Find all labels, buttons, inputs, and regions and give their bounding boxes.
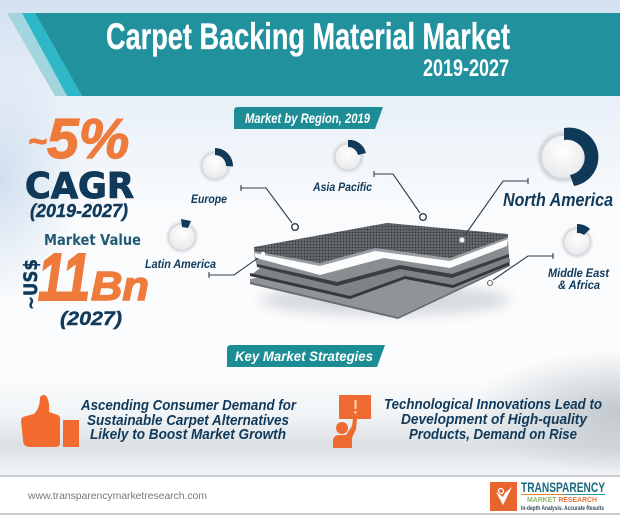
strategy text: technological innovations: Development of High-quality xyxy=(401,411,588,428)
market value figure: 11 xyxy=(38,240,90,315)
logo: Transparency Market Research xyxy=(490,479,605,512)
label: Middle East and Africa: & Africa xyxy=(558,278,600,292)
icon: thumbs up xyxy=(21,395,79,447)
heading pill: market by region: Market by Region, 2019 xyxy=(245,110,370,126)
donut: North America xyxy=(538,128,598,186)
donut: Asia Pacific xyxy=(333,140,366,172)
leader line: Latin America xyxy=(209,252,265,278)
strategy text: technological innovations: Products, Demand on Rise xyxy=(409,426,577,443)
strategy text: consumer demand: Sustainable Carpet Alternatives xyxy=(87,412,289,429)
logo tagline top: MARKET RESEARCH xyxy=(527,495,597,504)
market value label: Market Value xyxy=(44,231,141,249)
subtitle years: 2019-2027 xyxy=(423,55,509,82)
label: Europe: Europe xyxy=(191,192,227,206)
market value unit: Bn xyxy=(91,263,149,309)
leader line: Asia Pacific xyxy=(374,171,426,220)
footer band xyxy=(0,475,620,518)
market value stats xyxy=(20,231,149,330)
donut: Latin America xyxy=(167,219,197,252)
CAGR label: CAGR xyxy=(25,166,134,207)
strategy text: consumer demand: Ascending Consumer Demand for xyxy=(80,397,297,414)
donut: Europe xyxy=(200,148,233,181)
CAGR value: ~ xyxy=(28,123,47,159)
CAGR period: (2019-2027) xyxy=(30,201,128,221)
strategy text: consumer demand xyxy=(80,397,297,443)
website url: www.transparencymarketresearch.com xyxy=(27,490,207,502)
strategy text: consumer demand: Likely to Boost Market Growth xyxy=(90,426,286,443)
header banner xyxy=(7,13,620,96)
market value year: (2027) xyxy=(60,309,122,330)
label: Asia Pacific: Asia Pacific xyxy=(312,180,372,194)
leader line: North America xyxy=(459,178,528,243)
leader line: Europe xyxy=(241,185,298,230)
heading pill: key market strategies: Key Market Strategies xyxy=(235,348,373,364)
label: Latin America: Latin America xyxy=(145,257,216,271)
CAGR stats xyxy=(25,107,134,221)
logo mark xyxy=(490,482,517,511)
heading pill: market by region xyxy=(234,107,383,129)
carpet layers illustration xyxy=(250,223,510,319)
leader line: Middle East and Africa xyxy=(488,253,553,286)
heading pill: key market strategies xyxy=(227,345,385,367)
icon: person holding alert sign xyxy=(333,395,371,448)
label: Middle East and Africa xyxy=(548,266,610,292)
label: Middle East and Africa: Middle East xyxy=(548,266,610,280)
strategy text: technological innovations xyxy=(384,396,602,443)
donut: Middle East and Africa xyxy=(562,224,592,257)
currency label: ~US$ xyxy=(20,259,42,310)
CAGR value: 5% xyxy=(47,107,129,171)
